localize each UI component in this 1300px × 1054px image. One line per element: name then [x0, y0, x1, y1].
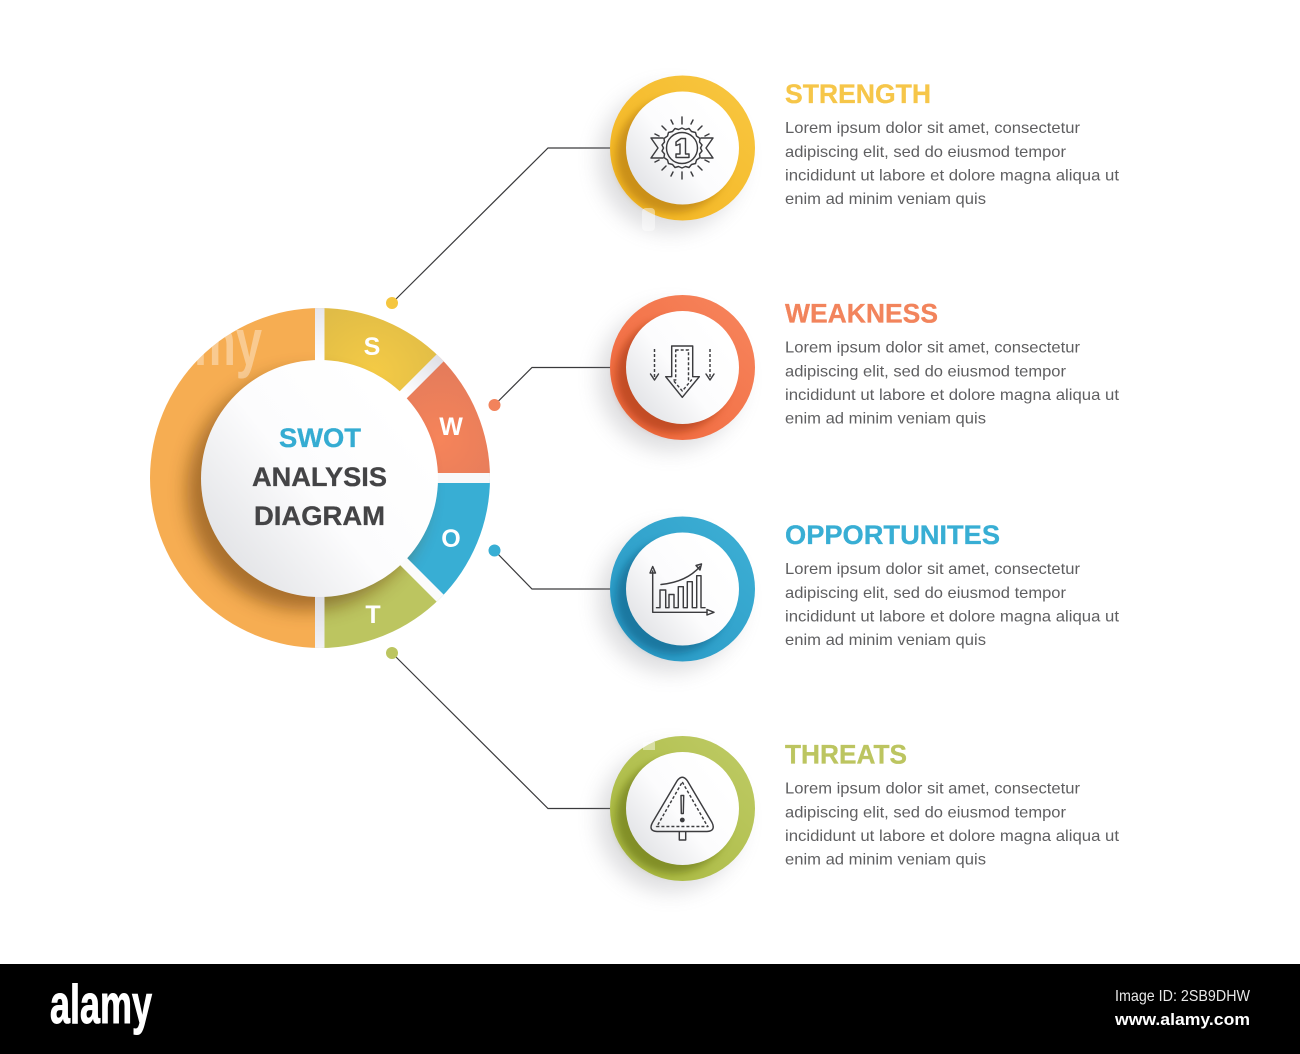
hub title: SWOT — [279, 423, 362, 453]
body: threats: Lorem ipsum dolor sit amet, consectetur — [785, 780, 1081, 798]
connector: strength — [386, 148, 612, 309]
body: opportunities: enim ad minim veniam quis — [785, 632, 986, 649]
connector: opportunities — [488, 544, 612, 589]
text block: opportunities — [785, 520, 1120, 649]
gaps — [315, 300, 495, 655]
icon: medal number one — [651, 117, 713, 179]
center hub — [201, 360, 438, 597]
segment: O — [320, 478, 490, 598]
letter W: W — [439, 413, 463, 441]
heading: threats: THREATS — [785, 740, 907, 770]
body: threats — [785, 780, 1120, 868]
segment: large orange half — [150, 308, 320, 648]
footer image id: Image ID: 2SB9DHW — [1115, 988, 1251, 1005]
badge: weakness — [598, 295, 755, 451]
segment: W — [320, 358, 490, 478]
letter T: T — [365, 601, 381, 629]
watermark fragment — [643, 742, 655, 750]
footer bar — [0, 964, 1300, 1054]
letter O: O — [441, 525, 461, 553]
body: strength: enim ad minim veniam quis — [785, 191, 986, 208]
body: weakness — [785, 340, 1120, 428]
badge: opportunities — [598, 516, 755, 672]
body: threats: incididunt ut labore et dolore magna aliqua ut — [785, 828, 1120, 845]
connector: weakness — [488, 368, 612, 411]
segment: S — [320, 308, 440, 478]
body: strength — [785, 120, 1120, 208]
connector: threats — [386, 647, 612, 808]
donut: SWOT segments — [150, 300, 495, 655]
footer url: www.alamy.com — [1114, 1010, 1250, 1029]
body: opportunities: adipiscing elit, sed do eiusmod tempor — [785, 585, 1067, 602]
icon: warning sign — [651, 777, 713, 840]
watermark fragment: my — [194, 305, 262, 379]
watermark fragment — [642, 208, 655, 231]
icon: down arrows — [650, 346, 714, 397]
heading: opportunities: OPPORTUNITES — [785, 520, 1000, 550]
heading: strength: STRENGTH — [785, 79, 931, 109]
body: weakness: enim ad minim veniam quis — [785, 410, 986, 428]
body: strength: adipiscing elit, sed do eiusmod tempor — [785, 144, 1067, 161]
hub title — [252, 423, 387, 531]
badge: threats — [598, 736, 755, 892]
body: threats: enim ad minim veniam quis — [785, 852, 986, 868]
hub title: ANALYSIS — [252, 462, 387, 492]
hub shadow on ring — [187, 372, 425, 610]
body: opportunities: Lorem ipsum dolor sit amet, consectetur — [785, 561, 1081, 578]
letter S: S — [364, 333, 380, 361]
text block: weakness — [785, 298, 1120, 428]
body: opportunities: incididunt ut labore et dolore magna aliqua ut — [785, 608, 1120, 626]
badge: strength — [598, 76, 755, 232]
icon: rising bar chart — [650, 564, 714, 615]
body: strength: incididunt ut labore et dolore magna aliqua ut — [785, 168, 1120, 184]
segment: T — [320, 478, 440, 648]
heading: weakness: WEAKNESS — [785, 298, 938, 328]
body: weakness: adipiscing elit, sed do eiusmod tempor — [785, 364, 1067, 380]
hub title: DIAGRAM — [254, 501, 385, 531]
body: weakness: incididunt ut labore et dolore magna aliqua ut — [785, 387, 1120, 404]
body: weakness: Lorem ipsum dolor sit amet, consectetur — [785, 340, 1081, 356]
footer logo: alamy — [50, 973, 152, 1035]
segment letters — [364, 333, 463, 629]
body: opportunities — [785, 561, 1120, 649]
text block: strength — [785, 79, 1120, 208]
body: strength: Lorem ipsum dolor sit amet, consectetur — [785, 120, 1081, 137]
body: threats: adipiscing elit, sed do eiusmod tempor — [785, 804, 1067, 822]
text block: threats — [785, 740, 1120, 868]
